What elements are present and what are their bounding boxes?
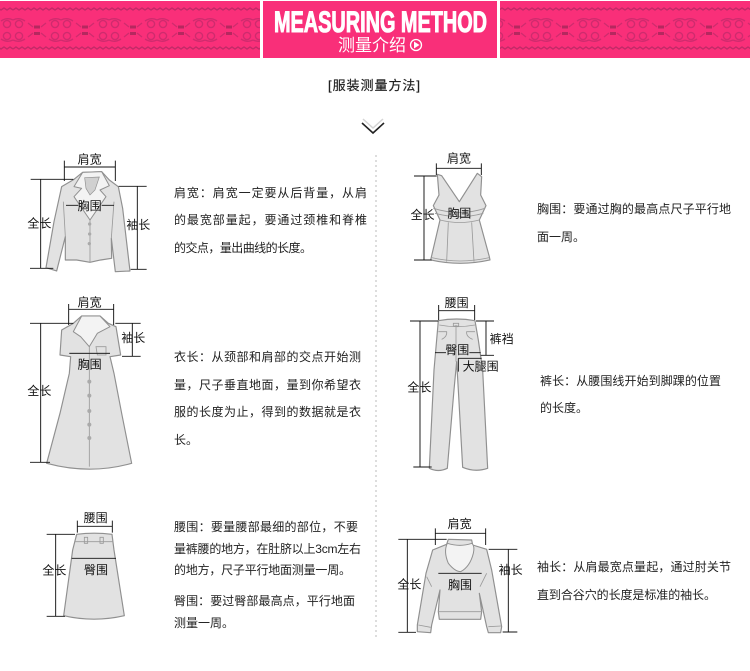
garment: dress	[27, 294, 145, 469]
garment: jacket: 袖长	[126, 217, 150, 232]
banner	[0, 1, 750, 58]
banner: right ornament	[500, 1, 750, 58]
text: shoulder width	[174, 185, 367, 255]
icon: play circle	[410, 40, 422, 50]
text: sleeve length	[537, 559, 731, 602]
text: waist and hip	[174, 519, 361, 630]
text: waist and hip: 量裤腰的地方，在肚脐以上3cm左右	[174, 541, 361, 556]
text: sleeve length: 直到合谷穴的长度是标准的袖长。	[537, 587, 716, 602]
text: waist and hip: 腰围：要量腰部最细的部位，不要	[174, 519, 358, 534]
garment: dress: 全长	[27, 383, 51, 398]
text: waist and hip: 臀围：要过臀部最高点，平行地面	[174, 593, 355, 608]
subheading: 测量介绍	[338, 36, 406, 55]
icon: chevron down	[362, 119, 384, 133]
garment: trousers	[407, 296, 514, 470]
garment: tank top	[411, 150, 490, 263]
garment: trousers: 臀围	[445, 343, 469, 357]
centre dotted divider	[375, 155, 377, 640]
garment: tank top: 胸围	[447, 206, 471, 221]
garment: sweater: 胸围	[448, 577, 472, 592]
text: garment length: 服的长度为止，得到的数据就是衣	[174, 404, 361, 419]
garment: skirt: 臀围	[84, 563, 108, 577]
garment: trousers: 裤裆	[490, 332, 514, 346]
text: garment length: 衣长：从颈部和肩部的交点开始测	[174, 349, 361, 364]
text: shoulder width: 的交点，量出曲线的长度。	[174, 240, 312, 255]
text: bust: 胸围：要通过胸的最高点尺子平行地	[537, 201, 731, 216]
garment: trousers: 全长	[407, 380, 431, 395]
garment: sweater	[397, 516, 523, 633]
text: garment length: 长。	[174, 433, 198, 447]
garment: tank top: 全长	[411, 207, 435, 222]
garment: jacket	[27, 151, 150, 272]
garment: skirt	[42, 511, 124, 619]
text: trouser length	[540, 373, 721, 415]
section title: [服装测量方法]	[328, 78, 420, 93]
text: bust	[537, 201, 731, 244]
text: bust: 面一周。	[537, 230, 585, 244]
garment: skirt: 腰围	[84, 511, 108, 525]
heading: measuring method: MEASURING METHOD	[274, 6, 487, 39]
garment: dress: 袖长	[121, 330, 145, 345]
garment: trousers: 腰围	[445, 296, 469, 310]
text: garment length	[174, 349, 361, 447]
banner: left ornament	[0, 1, 260, 58]
garment: skirt: 全长	[42, 563, 66, 578]
text: waist and hip: 的地方，尺子平行地面测量一周。	[174, 562, 351, 577]
text: shoulder width: 肩宽：肩宽一定要从后背量，从肩	[174, 185, 367, 200]
garment: sweater: 肩宽	[448, 516, 472, 531]
text: shoulder width: 的最宽部量起，要通过颈椎和脊椎	[174, 212, 367, 227]
text: sleeve length: 袖长：从肩最宽点量起，通过肘关节	[537, 559, 731, 574]
garment: sweater: 袖长	[499, 562, 523, 577]
garment: jacket: 肩宽	[78, 151, 102, 166]
text: trouser length: 的长度。	[540, 400, 588, 415]
garment: sweater: 全长	[397, 576, 421, 591]
garment: trousers: 大腿围	[463, 359, 499, 373]
garment: dress: 胸围	[78, 356, 102, 371]
text: waist and hip: 测量一周。	[174, 616, 234, 630]
garment: jacket: 胸围	[78, 198, 102, 213]
garment: jacket: 全长	[27, 215, 51, 230]
garment: dress: 肩宽	[78, 294, 102, 309]
garment: tank top: 肩宽	[447, 150, 471, 165]
text: garment length: 量，尺子垂直地面，量到你希望衣	[174, 377, 361, 392]
banner: centre panel	[263, 1, 497, 58]
text: trouser length: 裤长：从腰围线开始到脚踝的位置	[540, 373, 721, 388]
